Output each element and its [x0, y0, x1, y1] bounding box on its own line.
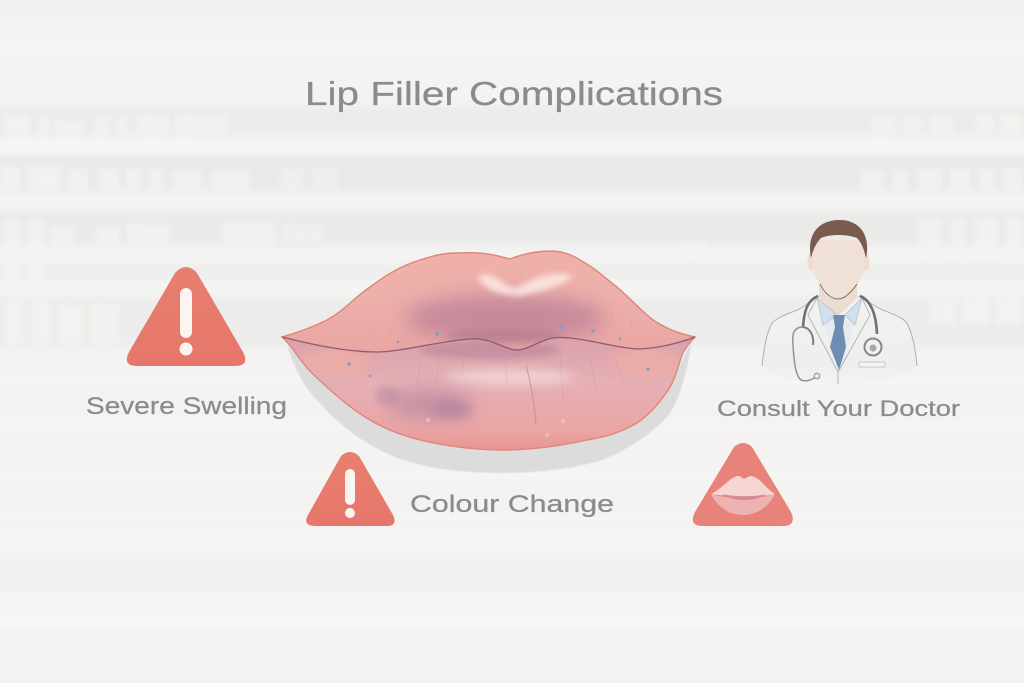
lips shadow [287, 340, 692, 473]
blue spots [347, 325, 650, 377]
icon: warning triangle bottom [306, 452, 395, 526]
lips outline [282, 251, 695, 450]
badge [859, 362, 885, 367]
upper lip [284, 252, 693, 352]
icon: lips triangle [693, 443, 793, 526]
illustration: lips [280, 245, 700, 473]
neck [819, 280, 857, 316]
mouth line [282, 337, 695, 352]
background: blurred shelves [0, 111, 1024, 329]
illustration: doctor [762, 220, 917, 384]
ears [808, 253, 814, 271]
title: Lip Filler Complications [305, 75, 723, 112]
tie [830, 315, 846, 370]
stethoscope [803, 296, 877, 334]
coat [762, 296, 917, 384]
shirt [823, 314, 855, 372]
lower lip [280, 335, 700, 455]
icon: warning triangle left [127, 267, 245, 366]
lapels [808, 298, 870, 384]
collar [817, 298, 862, 325]
label: consult your doctor: Consult Your Doctor [717, 396, 960, 421]
pale spots [426, 418, 566, 437]
face [813, 240, 864, 299]
label: colour change: Colour Change [410, 491, 614, 518]
hair [810, 220, 867, 258]
label: severe swelling: Severe Swelling [86, 393, 287, 420]
